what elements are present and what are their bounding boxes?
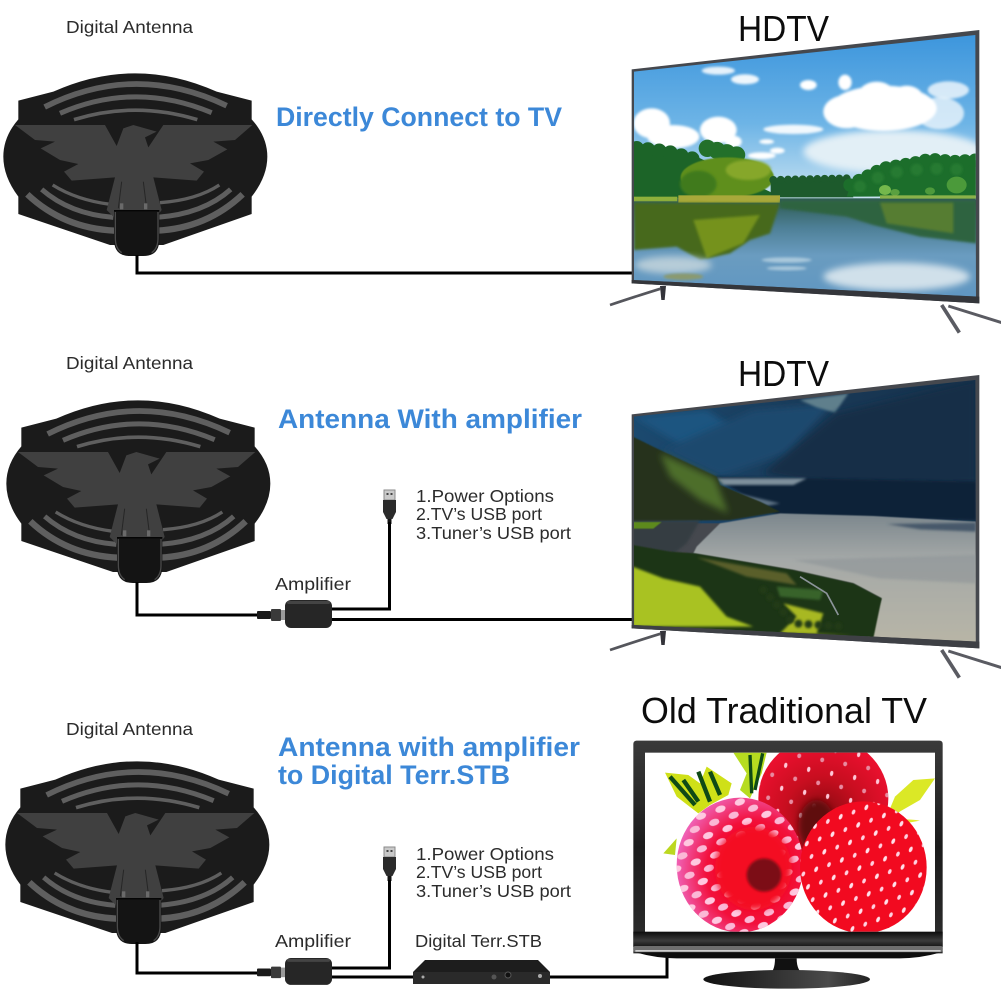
cable: antenna to TV (137, 255, 634, 273)
cable: antenna to amplifier (137, 942, 258, 973)
icon: set top box (413, 960, 550, 984)
icon: amplifier (257, 958, 332, 985)
panel: antenna with amplifier to set top box (5, 690, 943, 989)
label: amplifier: Amplifier (275, 931, 351, 951)
power options list: 2.TV’s USB port (416, 862, 542, 882)
icon: amplifier (257, 600, 332, 628)
heading: antenna with amplifier to Digital Terr.STB (278, 732, 581, 790)
heading: antenna with amplifier to Digital Terr.STB: Antenna with amplifier (278, 732, 581, 762)
power options list: 1.Power Options (416, 486, 554, 506)
heading: antenna with amplifier: Antenna With amplifier (278, 404, 582, 434)
power options list: 1.Power Options (416, 844, 554, 864)
power options list: 2.TV’s USB port (416, 504, 542, 524)
cable: amplifier to STB to TV (332, 955, 667, 977)
old TV with raspberries (633, 737, 943, 989)
power options list: 3.Tuner’s USB port (416, 881, 571, 901)
label: digital antenna: Digital Antenna (66, 353, 193, 373)
heading: directly connect to TV: Directly Connect to TV (276, 102, 562, 132)
heading: antenna with amplifier to Digital Terr.STB: to Digital Terr.STB (278, 760, 510, 790)
icon: eagle antenna (3, 73, 267, 256)
power options list (416, 486, 571, 543)
panel: direct connection (3, 8, 1001, 333)
cable: amplifier to TV (332, 618, 634, 621)
icon: USB plug (383, 847, 396, 881)
label: old traditional TV: Old Traditional TV (641, 690, 927, 731)
icon: eagle antenna (5, 761, 269, 944)
power options list: 3.Tuner’s USB port (416, 523, 571, 543)
panel: antenna with amplifier (6, 353, 1001, 678)
label: HDTV: HDTV (738, 353, 829, 394)
cable: USB power (332, 522, 390, 609)
TV with lake scene (610, 30, 1001, 333)
label: digital antenna: Digital Antenna (66, 17, 193, 37)
icon: eagle antenna (6, 400, 270, 583)
cable: USB power (332, 880, 390, 968)
TV with fjord scene (610, 375, 1001, 678)
icon: USB plug (383, 490, 396, 524)
label: digital antenna: Digital Antenna (66, 719, 193, 739)
label: digital terr.STB: Digital Terr.STB (415, 931, 542, 951)
label: amplifier: Amplifier (275, 574, 351, 594)
label: HDTV: HDTV (738, 8, 829, 49)
power options list (416, 844, 571, 901)
cable: antenna to amplifier (137, 582, 258, 615)
